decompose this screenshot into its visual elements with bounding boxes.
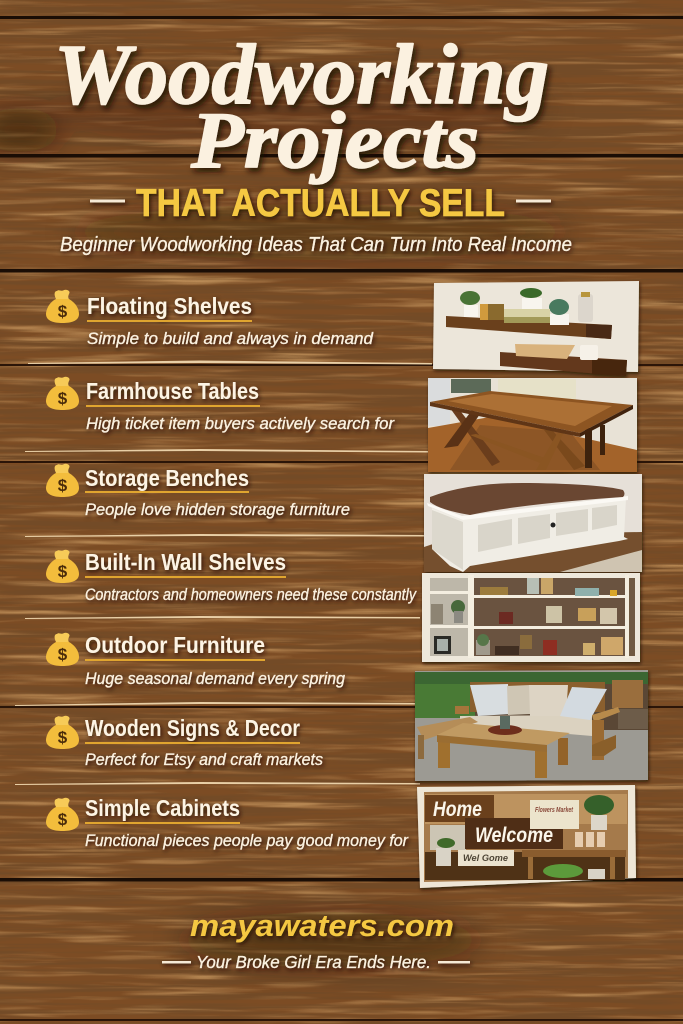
sign lettering: Home	[433, 798, 482, 821]
list item: floating shelves	[46, 290, 374, 348]
heading: Farmhouse Tables	[86, 378, 259, 404]
icon: money bag: $	[58, 562, 68, 581]
photo: outdoor furniture	[415, 670, 648, 781]
heading: Simple Cabinets	[85, 795, 240, 821]
icon: money bag	[46, 550, 79, 583]
list item: storage benches	[46, 464, 350, 519]
icon: money bag: $	[58, 302, 68, 321]
heading: Floating Shelves	[87, 293, 252, 319]
description: Functional pieces people pay good money for	[85, 831, 409, 850]
photo: wooden signs	[417, 785, 636, 888]
description: Simple to build and always in demand	[87, 329, 374, 348]
icon: money bag	[46, 716, 79, 749]
footer: website: mayawaters.com	[190, 908, 454, 943]
icon: money bag	[46, 798, 79, 831]
photo: built-in shelves	[422, 573, 640, 662]
heading: Wooden Signs & Decor	[85, 715, 300, 741]
icon: money bag: $	[58, 389, 68, 408]
description: Huge seasonal demand every spring	[85, 669, 346, 688]
heading: Outdoor Furniture	[85, 632, 265, 658]
icon: money bag: $	[58, 645, 68, 664]
heading: Built-In Wall Shelves	[85, 549, 286, 575]
list item: outdoor furniture	[46, 632, 346, 688]
list item: wooden signs and decor	[46, 715, 323, 769]
sign lettering: Wel Gome	[463, 853, 508, 863]
list item: farmhouse tables	[46, 377, 395, 433]
description: Contractors and homeowners need these constantly	[85, 585, 417, 604]
tagline: Beginner Woodworking Ideas That Can Turn Into Real Income	[60, 234, 572, 256]
icon: money bag	[46, 290, 79, 323]
photo: farmhouse table	[428, 378, 637, 472]
description: People love hidden storage furniture	[85, 500, 350, 519]
description: High ticket item buyers actively search for	[86, 414, 395, 433]
title: Projects	[190, 97, 479, 185]
list item: simple cabinets	[46, 795, 409, 850]
heading: Storage Benches	[85, 465, 249, 491]
icon: money bag: $	[58, 728, 68, 747]
sign lettering	[433, 798, 573, 863]
icon: money bag	[46, 464, 79, 497]
title: Woodworking	[54, 26, 549, 122]
subtitle: that actually sell: THAT ACTUALLY SELL	[136, 182, 505, 225]
description: Perfect for Etsy and craft markets	[85, 750, 323, 769]
sign lettering: Flowers Market	[535, 807, 573, 814]
cream divider strokes	[15, 360, 432, 785]
footer: tagline: Your Broke Girl Era Ends Here.	[196, 952, 431, 972]
photo: storage bench	[424, 474, 642, 572]
icon: money bag	[46, 377, 79, 410]
icon: money bag: $	[58, 810, 68, 829]
photo: floating shelves	[433, 281, 639, 376]
sign lettering: Welcome	[475, 824, 553, 847]
icon: money bag: $	[58, 476, 68, 495]
icon: money bag	[46, 633, 79, 666]
list item: built-in wall shelves	[46, 549, 417, 604]
title	[54, 26, 549, 185]
